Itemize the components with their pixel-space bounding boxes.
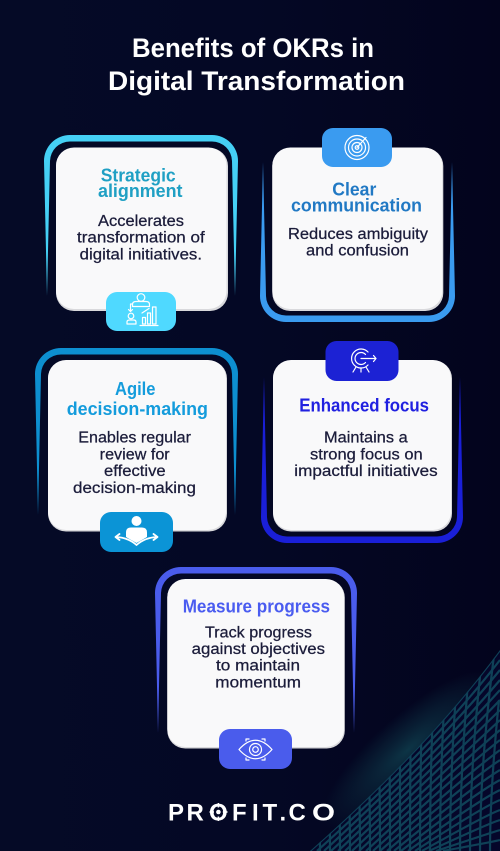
heading: clear communication xyxy=(291,180,422,216)
text: measure progress description xyxy=(192,624,325,692)
text: enhanced focus description: strong focus on xyxy=(310,446,423,464)
heading: clear communication: Clear xyxy=(332,180,376,200)
icon: eye xyxy=(219,729,292,769)
heading: agile decision-making: Agile xyxy=(115,379,156,399)
logo: O xyxy=(312,800,335,826)
text: measure progress description: momentum xyxy=(215,675,301,692)
heading: agile decision-making xyxy=(67,379,208,419)
text: clear communication description: Reduces ambiguity xyxy=(288,226,428,243)
heading: strategic alignment xyxy=(98,166,182,201)
icon: radar xyxy=(322,128,392,167)
text: agile decision-making description: decision-making xyxy=(73,480,196,497)
title xyxy=(108,33,405,96)
title: Benefits of OKRs in xyxy=(132,33,374,63)
text: enhanced focus description: impactful initiatives xyxy=(294,463,438,480)
text: strategic alignment description: transformation of xyxy=(77,230,205,247)
heading: clear communication: communication xyxy=(291,196,422,216)
text: measure progress description: to maintain xyxy=(216,658,300,675)
panel: strategic alignment xyxy=(44,135,238,331)
heading: strategic alignment: Strategic xyxy=(101,166,176,186)
background glow xyxy=(302,650,500,850)
panel: enhanced focus xyxy=(261,341,463,543)
heading: enhanced focus: Enhanced focus xyxy=(299,396,429,416)
text: enhanced focus description xyxy=(294,430,438,480)
text: agile decision-making description: Enables regular xyxy=(78,430,191,447)
text: clear communication description xyxy=(288,226,428,260)
icon: person and bar chart xyxy=(106,292,176,331)
text: strategic alignment description xyxy=(77,213,205,263)
text: strategic alignment description: Accelerates xyxy=(98,213,184,230)
heading: measure progress: Measure progress xyxy=(183,596,330,616)
text: agile decision-making description: effective xyxy=(104,463,166,480)
panel: agile decision-making xyxy=(35,348,238,552)
text: measure progress description: Track progress xyxy=(205,624,312,641)
text: agile decision-making description xyxy=(73,430,196,497)
text: strategic alignment description: digital initiatives. xyxy=(80,246,202,263)
icon: target with arrow xyxy=(326,341,398,381)
title: Digital Transformation xyxy=(108,66,405,96)
heading: strategic alignment: alignment xyxy=(98,181,182,201)
panel: measure progress xyxy=(155,567,357,769)
panel: clear communication xyxy=(260,128,455,322)
text: clear communication description: and confusion xyxy=(306,243,409,260)
icon: reader with arrows xyxy=(100,512,173,552)
background mesh xyxy=(310,650,500,851)
heading: agile decision-making: decision-making xyxy=(67,399,208,419)
text: measure progress description: against objectives xyxy=(192,641,325,658)
text: enhanced focus description: Maintains a xyxy=(324,430,408,447)
text: agile decision-making description: review for xyxy=(100,446,170,463)
logo: PROFIT.C xyxy=(168,800,306,826)
